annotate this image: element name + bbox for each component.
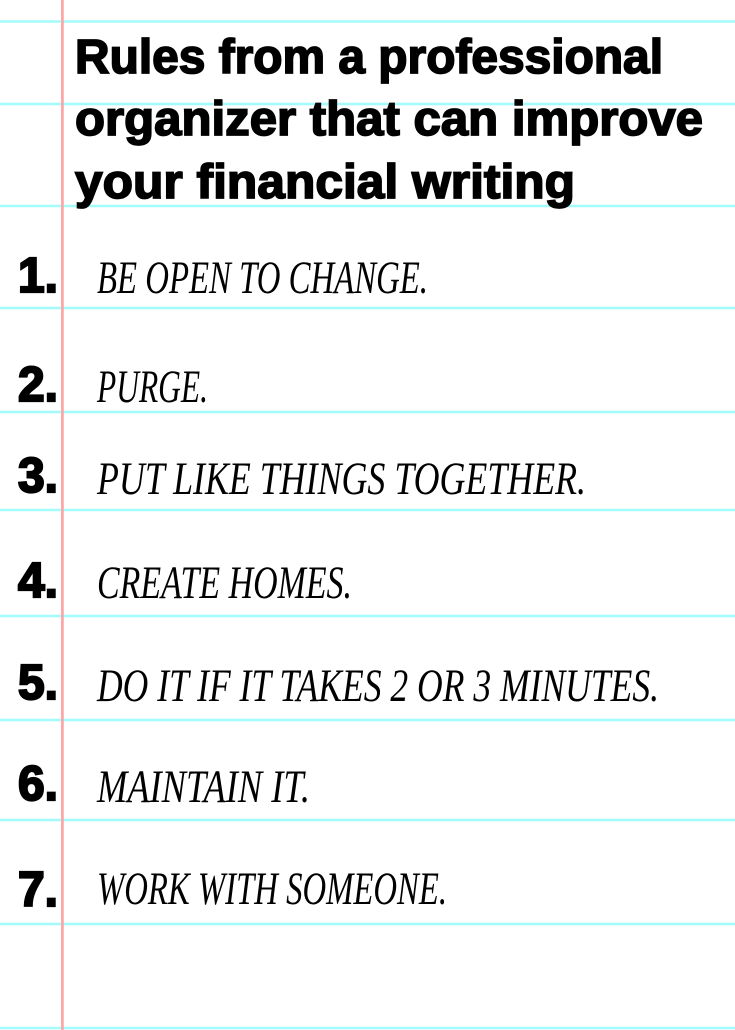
rule 7: WORK WITH SOMEONE. [97,863,447,915]
rule 2 [18,358,208,413]
title: organizer that can improve [75,93,703,146]
rule 5: 5. [18,656,58,710]
rule 1: BE OPEN TO CHANGE. [97,252,428,304]
title: your financial writing [75,156,575,209]
rule 7 [18,863,447,917]
margin line [61,0,64,1030]
rule 1: 1. [18,249,58,303]
title [75,31,703,209]
rule 3: PUT LIKE THINGS TOGETHER. [96,453,586,505]
rule 4: 4. [18,554,58,608]
rule 4 [18,554,352,609]
rule 1 [18,249,428,304]
rule 2: PURGE. [96,361,208,413]
rule 6 [18,757,310,813]
rule 6: MAINTAIN IT. [96,761,310,813]
rule 7: 7. [18,863,58,917]
rule 6: 6. [18,757,58,811]
rule 3: 3. [18,449,58,503]
rule 2: 2. [18,358,58,412]
title: Rules from a professional [75,31,663,84]
rule 4: CREATE HOMES. [97,557,352,609]
rule 3 [18,449,586,505]
